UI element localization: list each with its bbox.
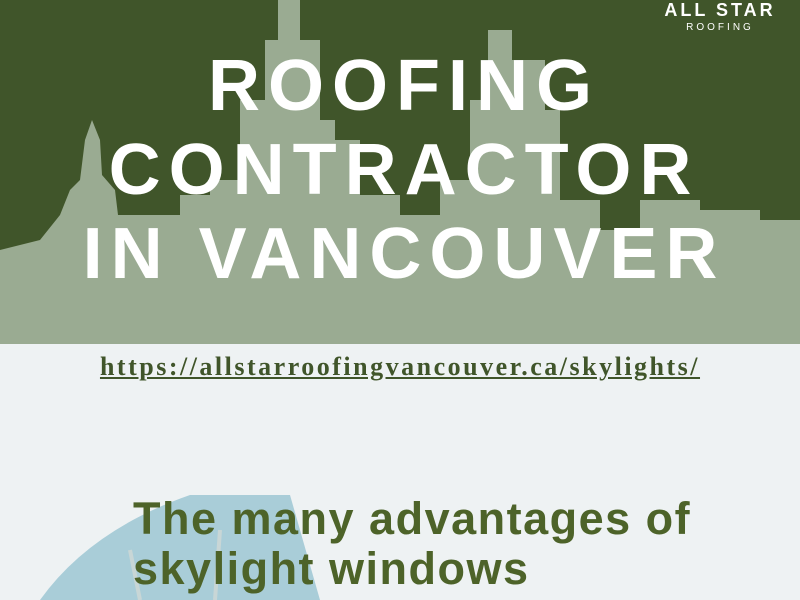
skyline silhouette xyxy=(0,0,800,344)
section heading: skylight windows xyxy=(133,543,530,594)
logo: ROOFING xyxy=(686,22,754,33)
hero panel xyxy=(0,0,800,344)
logo xyxy=(664,0,776,33)
title: CONTRACTOR xyxy=(109,130,699,210)
logo: ALL STAR xyxy=(664,0,776,20)
title xyxy=(83,46,725,294)
url link: https://allstarroofingvancouver.ca/skylights/ xyxy=(100,352,700,381)
section heading xyxy=(133,493,691,594)
title: IN VANCOUVER xyxy=(83,214,725,294)
section heading: The many advantages of xyxy=(133,493,691,544)
skylight image xyxy=(40,495,320,600)
title: ROOFING xyxy=(208,46,600,126)
